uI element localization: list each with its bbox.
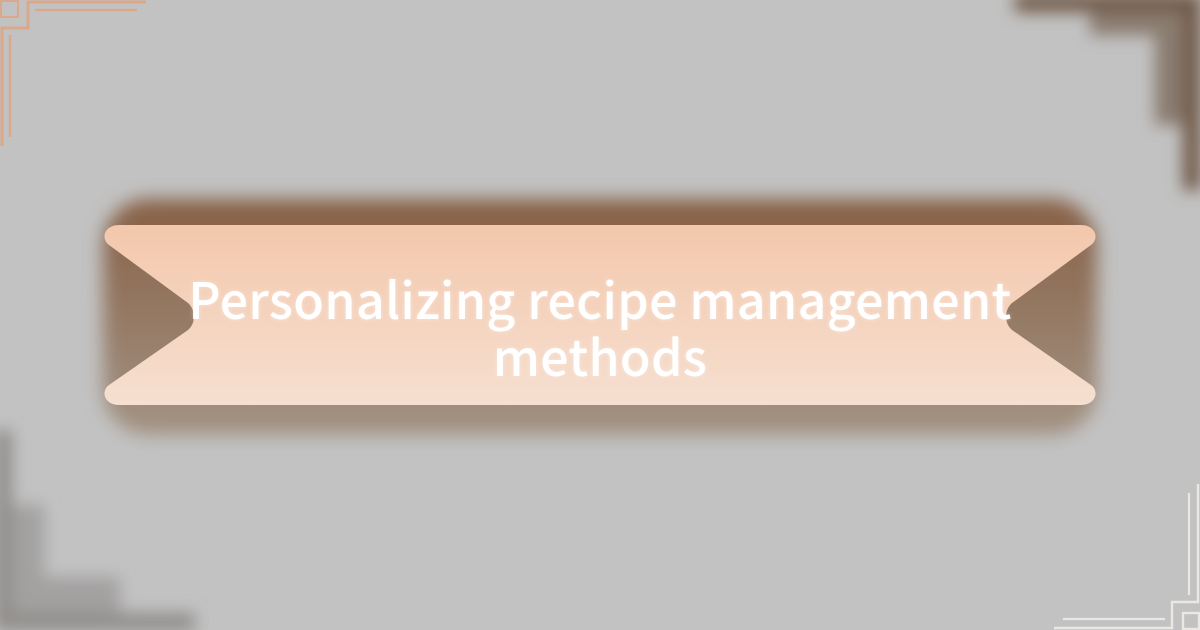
blurred bottom-left corner shadow [3,430,195,622]
top-left corner ornament [1,1,146,146]
blurred top-right corner shadow [1015,3,1192,190]
banner shadow [103,199,1097,435]
title: methods [493,319,707,391]
bottom-right corner ornament [1054,484,1199,629]
title: Personalizing recipe management [188,262,1012,334]
title [188,262,1012,391]
ribbon banner [104,225,1096,405]
